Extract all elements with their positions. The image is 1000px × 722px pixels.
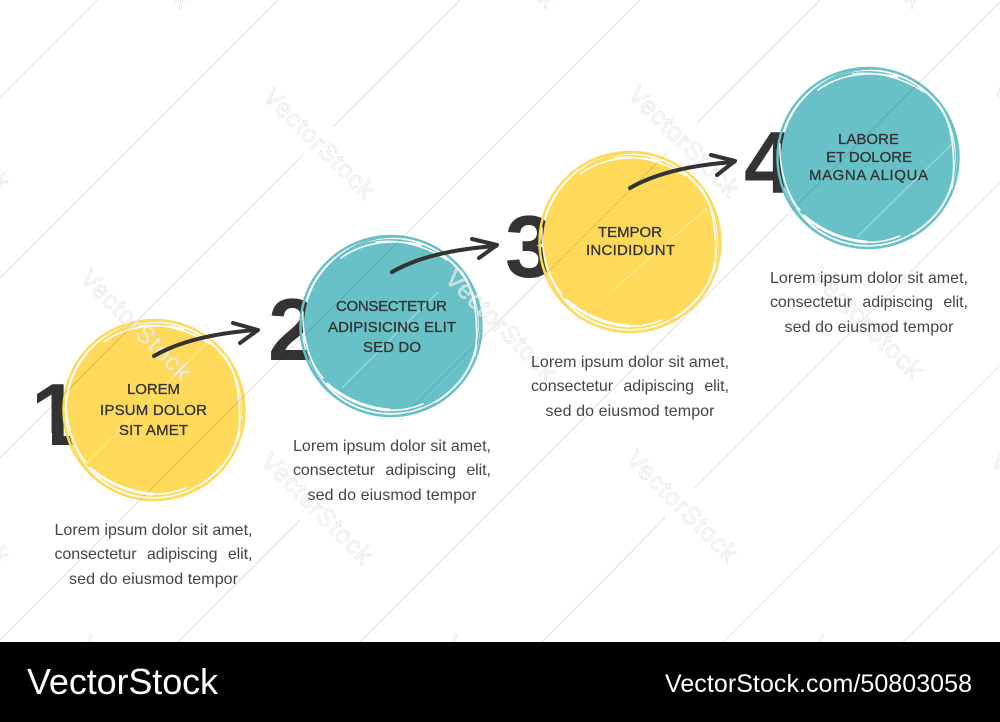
- text block 4: Lorem ipsum dolor sit amet,: [770, 270, 968, 287]
- watermarks: VectorStock: [74, 264, 197, 387]
- text block 3: sed do eiusmod tempor: [546, 403, 715, 420]
- circle 4: [752, 40, 986, 277]
- watermarks: VectorStock: [255, 447, 378, 570]
- text block 1: consectetur adipiscing elit,: [54, 546, 252, 563]
- text block 3: consectetur adipiscing elit,: [531, 378, 729, 395]
- footer bar: VectorStock.com/50803058: [665, 670, 972, 698]
- circle 2 label: [328, 298, 456, 356]
- text block 2: sed do eiusmod tempor: [308, 487, 477, 504]
- text block 3: [531, 354, 729, 420]
- circle 2 label: CONSECTETUR: [336, 298, 447, 315]
- text block 2: Lorem ipsum dolor sit amet,: [293, 438, 491, 455]
- watermarks: VectorStock: [620, 445, 743, 568]
- text block 1: Lorem ipsum dolor sit amet,: [54, 522, 252, 539]
- watermarks: VectorStock: [622, 80, 745, 203]
- circle 1 label: [100, 381, 207, 439]
- circle 3 label: TEMPOR: [598, 224, 662, 241]
- number 4: 4: [744, 113, 793, 212]
- text block 2: consectetur adipiscing elit,: [293, 462, 491, 479]
- text block 2: [293, 438, 491, 504]
- watermarks: VectorStock: [805, 262, 928, 385]
- text block 1: sed do eiusmod tempor: [69, 571, 239, 588]
- watermarks: VectorStock: [257, 82, 380, 205]
- circle 2 label: SED DO: [363, 339, 421, 356]
- circle 2: [275, 208, 509, 445]
- circle 4 label: MAGNA ALIQUA: [809, 167, 928, 184]
- number 2: 2: [268, 280, 317, 379]
- circle 4 label: LABORE: [838, 131, 899, 148]
- circle 3: [514, 124, 748, 361]
- circle 3 label: INCIDIDUNT: [586, 242, 675, 259]
- circle 1 label: LOREM: [127, 381, 180, 398]
- circle 3 label: [586, 224, 675, 259]
- arrow 1: [154, 323, 258, 356]
- circle 4 label: ET DOLORE: [826, 149, 912, 166]
- watermarks: VectorStock: [439, 264, 562, 387]
- arrow 2: [392, 239, 497, 272]
- number 3: 3: [505, 197, 554, 296]
- circle 4 label: [809, 131, 928, 184]
- text block 4: sed do eiusmod tempor: [784, 319, 954, 336]
- number 1: 1: [31, 365, 80, 464]
- arrow 3: [630, 155, 735, 188]
- text block 4: [770, 270, 968, 336]
- text block 3: Lorem ipsum dolor sit amet,: [531, 354, 729, 371]
- circle 1 label: IPSUM DOLOR: [100, 402, 207, 419]
- text block 1: [54, 522, 252, 588]
- footer bar: VectorStock: [27, 661, 219, 702]
- text block 4: consectetur adipiscing elit,: [770, 294, 968, 311]
- circle 1: [38, 292, 272, 529]
- circle 2 label: ADIPISICING ELIT: [328, 319, 456, 336]
- footer bar: [0, 642, 1000, 722]
- circle 1 label: SIT AMET: [119, 422, 188, 439]
